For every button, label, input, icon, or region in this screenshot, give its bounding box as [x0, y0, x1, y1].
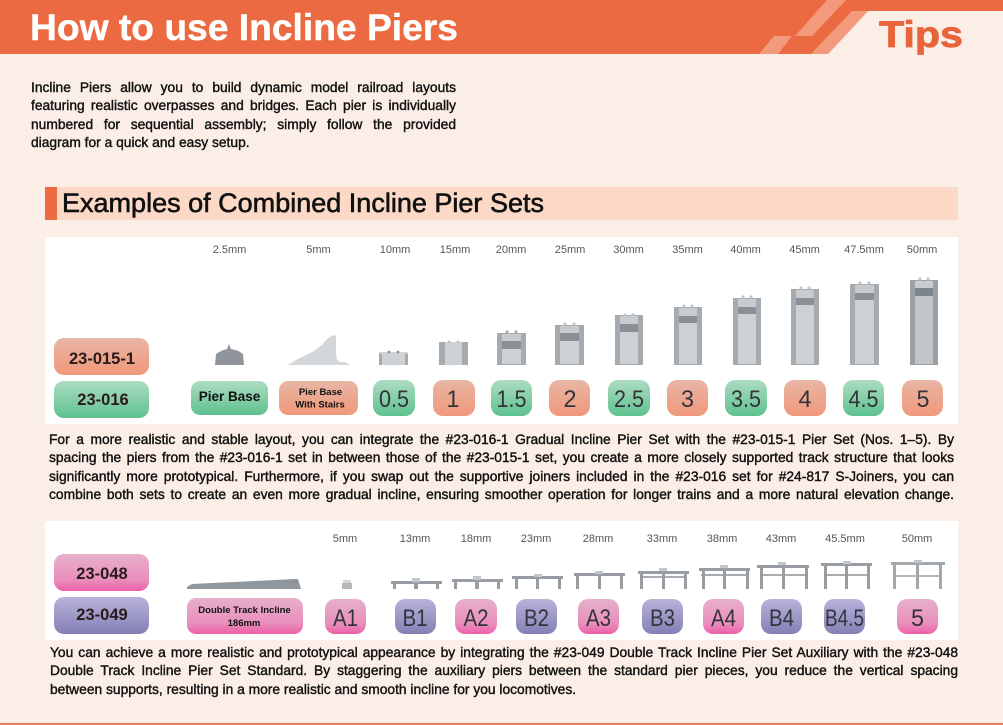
tag: 1.5: 1.5	[496, 386, 526, 413]
description: 23-016 with 23-015-1: significantly more prototypical. Furthermore, if you swap out the supportive joiners included in the #23-016 set for #24-817 S-Joiners, you can	[49, 469, 954, 484]
height labels: 20mm	[496, 244, 526, 256]
height labels: 43mm	[766, 533, 796, 545]
tag: double track incline: Double Track Incline	[198, 605, 291, 616]
description: 23-016 with 23-015-1: For a more realistic and stable layout, you can integrate the #23-016-1 Gradual Incline Pier Set with the #23-015-1 Pier Set (Nos. 1–5). By	[49, 432, 954, 447]
set label: 23-016: 23-016	[77, 391, 129, 409]
tag: 1	[433, 380, 475, 416]
description: 23-016 with 23-015-1: combine both sets to create an even more gradual incline, ensuring smoother operation for longer trains and a more natural elevation change.	[49, 487, 954, 502]
set label: 23-049	[54, 597, 149, 634]
height labels: 5mm	[306, 244, 331, 256]
tips badge: Tips	[879, 14, 963, 55]
height labels	[333, 533, 932, 545]
tag: B3: B3	[650, 605, 675, 632]
icon: pier B1	[391, 578, 442, 589]
tag: 3: 3	[681, 386, 694, 413]
icon: pier 5	[910, 277, 938, 365]
tag: 5: 5	[916, 386, 930, 413]
tag: B4	[761, 599, 802, 634]
set label: 23-015-1: 23-015-1	[69, 350, 135, 368]
icon: pier 2.5	[615, 313, 643, 365]
tag: pier base: Pier Base	[199, 389, 261, 404]
panel: pier set 23-048 and 23-049	[45, 521, 958, 640]
intro text	[31, 80, 456, 150]
tag: A4: A4	[711, 605, 736, 632]
icon: double track incline	[187, 579, 301, 589]
section heading: Examples of Combined Incline Pier Sets	[62, 188, 544, 218]
height labels: 2.5mm	[213, 244, 246, 256]
set label: 23-048: 23-048	[76, 565, 128, 583]
tag: 3.5	[725, 380, 767, 416]
height labels: 35mm	[672, 244, 703, 256]
height labels: 50mm	[902, 533, 932, 545]
tag: 5	[897, 599, 938, 634]
tag: B4.5	[824, 599, 865, 634]
icon: pier base	[215, 344, 244, 365]
tag: pier base with stairs: Pier Base	[299, 387, 342, 398]
set label: 23-049: 23-049	[76, 606, 128, 624]
icon: pier A2	[452, 576, 503, 589]
icon: pier 0.5	[379, 351, 408, 365]
icon: pier B4	[757, 562, 809, 589]
icon: pier B3	[638, 568, 689, 589]
icon: pier B2	[512, 574, 563, 589]
tag: A1	[325, 599, 366, 634]
description: 23-016 with 23-015-1	[49, 432, 954, 502]
height labels: 50mm	[907, 244, 937, 256]
icon: pier 5 double	[891, 560, 945, 589]
tag: double track incline	[187, 598, 303, 634]
icon: pier A3	[574, 571, 625, 589]
height labels: 45mm	[789, 244, 820, 256]
intro text: numbered for sequential assembly; simply follow the provided	[31, 117, 456, 132]
height labels: 23mm	[521, 533, 551, 545]
tag: B1	[395, 599, 436, 634]
tag: 4.5	[843, 380, 884, 416]
tag: 0.5	[373, 380, 415, 416]
tag: B2: B2	[524, 605, 549, 632]
height labels: 18mm	[461, 533, 491, 545]
tag: double track incline: 186mm	[228, 618, 260, 629]
height labels	[213, 244, 937, 256]
tag: 0.5: 0.5	[379, 386, 409, 413]
tag: pier base	[191, 381, 268, 415]
icon: pier 4.5	[850, 281, 879, 365]
tag: 3.5: 3.5	[731, 386, 761, 413]
height labels: 5mm	[333, 533, 357, 545]
icon: pier 4	[791, 286, 819, 365]
icon: pier B4.5	[821, 561, 872, 589]
tag: 3	[667, 380, 708, 416]
description: 23-049 with 23-048: You can achieve a more realistic and prototypical appearance by integrating the #23-049 Double Track Incline Pier Set Auxiliary with the #23-048	[50, 645, 958, 660]
icon: pier 1.5	[497, 330, 526, 365]
tag: A3	[578, 599, 619, 634]
tag: A2: A2	[464, 605, 488, 632]
tag: A3: A3	[586, 605, 611, 632]
tag: pier base with stairs: With Stairs	[295, 400, 345, 410]
tag: A4	[703, 599, 744, 634]
icon: pier 2	[555, 322, 584, 365]
description: 23-049 with 23-048: between supports, resulting in a more realistic and smooth incline for you locomotives.	[50, 682, 576, 697]
tag: 4.5: 4.5	[848, 386, 878, 413]
set label: 23-016	[54, 381, 149, 418]
tag: B4.5: B4.5	[825, 605, 864, 632]
height labels: 38mm	[707, 533, 737, 545]
tag: B1: B1	[402, 605, 428, 632]
tag: B3	[642, 599, 683, 634]
tag: 2	[549, 380, 590, 416]
header banner	[0, 0, 1003, 54]
height labels: 40mm	[730, 244, 761, 256]
height labels: 47.5mm	[844, 244, 884, 256]
icon: pier 1	[439, 340, 468, 365]
intro text: Incline Piers allow you to build dynamic model railroad layouts	[31, 80, 456, 95]
tag: 4: 4	[798, 386, 812, 413]
set label: 23-048	[54, 554, 149, 591]
section heading	[45, 187, 958, 220]
tag: A2	[455, 599, 497, 634]
height labels: 25mm	[555, 244, 585, 256]
tag: 5: 5	[911, 605, 924, 632]
tag: 1: 1	[446, 386, 460, 413]
tag: B2	[516, 599, 557, 634]
panel: pier set 23-015-1 and 23-016	[45, 237, 958, 424]
intro text: diagram for a quick and easy setup.	[31, 135, 250, 150]
icon: pier 3.5	[733, 295, 761, 365]
height labels: 30mm	[613, 244, 644, 256]
title: How to use Incline Piers	[30, 6, 458, 48]
description: 23-016 with 23-015-1: spacing the piers from the #23-016-1 set in between those of the #23-015-1 set, you create a more closely supported track structure that looks	[49, 450, 954, 465]
tag: A1: A1	[333, 605, 358, 632]
height labels: 15mm	[440, 244, 470, 256]
tag: 2.5	[608, 380, 650, 416]
tag: 4	[784, 380, 826, 416]
icon: pier 3	[674, 304, 702, 365]
description: 23-049 with 23-048	[50, 645, 958, 698]
tag: 1.5	[491, 380, 532, 416]
icon: pier A1	[342, 580, 352, 589]
description: 23-049 with 23-048: Double Track Incline Pier Set Standard. By staggering the auxiliary piers between the standard pier pieces, you reduce the vertical spacing	[50, 663, 958, 678]
icon: pier base with stairs	[288, 335, 350, 365]
tag: 5	[902, 380, 943, 416]
intro text: featuring realistic overpasses and bridges. Each pier is individually	[31, 98, 456, 113]
height labels: 45.5mm	[825, 533, 865, 545]
height labels: 28mm	[583, 533, 613, 545]
tag: 2.5: 2.5	[614, 386, 644, 413]
tag: 2: 2	[564, 386, 576, 413]
tag: B4: B4	[769, 605, 794, 632]
footer rule	[0, 723, 1003, 725]
set label: 23-015-1	[54, 338, 149, 375]
height labels: 10mm	[380, 244, 410, 256]
height labels: 13mm	[400, 533, 430, 545]
icon: pier A4	[699, 565, 750, 589]
tag: pier base with stairs	[279, 381, 358, 415]
height labels: 33mm	[647, 533, 677, 545]
